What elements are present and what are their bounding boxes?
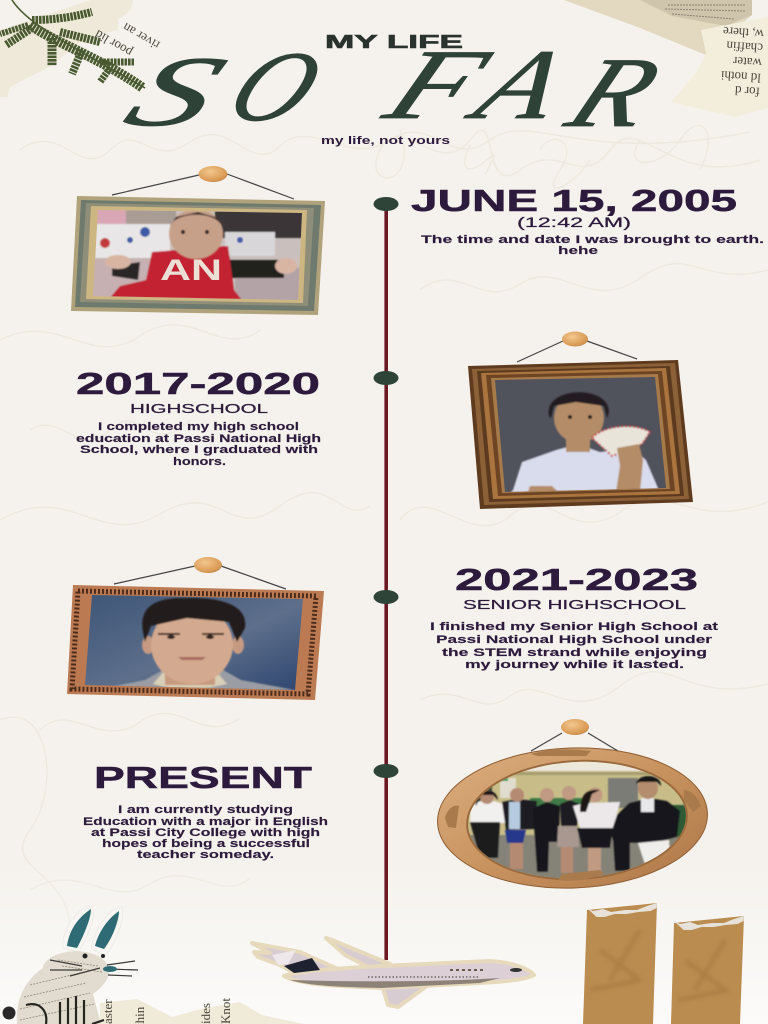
description: School, where I graduated with [80,444,318,456]
paper scrap: top right book [564,0,768,117]
description: my journey while it lasted. [465,659,684,671]
description: the STEM strand while enjoying [442,647,707,659]
period heading: 2017-2020 [76,366,320,401]
timeline dot 4 [374,764,398,778]
paper scrap: top right book: water [732,54,762,71]
description: The time and date I was brought to earth. [421,234,764,246]
text block: 2017-2020 [76,366,321,468]
paper scrap: bottom: ides [198,1003,213,1024]
paper scrap: bottom: aster [100,999,115,1024]
shirt letters: AN [160,254,222,287]
paper scrap: top left: poor lid [92,27,135,60]
paper scrap: top right book: ld nothi [720,68,761,86]
description: Passi National High School under [436,634,713,646]
heading: so far [110,29,677,148]
subheading: HIGHSCHOOL [130,401,268,416]
description: Education with a major in English [83,816,328,828]
description: I finished my Senior High School at [430,621,719,633]
heading: so far: R [551,37,677,148]
person six [611,776,680,871]
fuselage [284,961,534,988]
description [421,234,764,257]
frame: baby photo [71,166,325,315]
paper scrap: bottom: Knot [218,998,233,1024]
heading: my life: MY LIFE [325,32,463,52]
description: teacher someday. [137,849,274,861]
description [83,804,328,861]
person one [470,790,508,858]
time: (12:42 AM) [517,214,631,230]
description: at Passi City College with high [91,827,320,839]
date heading: JUNE 15, 2005 [411,183,737,218]
text block: 2021-2023 [430,562,719,671]
period heading: 2021-2023 [455,562,698,597]
paper scrap: bottom [100,998,304,1024]
paper scrap: top right book: w, there [722,24,764,42]
description [430,621,719,671]
timeline dot 2 [374,371,398,385]
subheading: SENIOR HIGHSCHOOL [463,597,686,612]
heading: so far: O [212,32,339,142]
timeline dot 1 [374,197,398,211]
description: I completed my high school [98,421,299,433]
person two [502,788,537,869]
description: education at Passi National High [76,433,321,445]
description [76,421,321,468]
frame: school portrait [67,557,324,700]
paper scrap: top left: river an [119,20,162,53]
description: hopes of being a successful [102,838,310,850]
tail [252,943,340,976]
icon: rabbit [2,906,138,1024]
tape strip left [583,903,657,1024]
timeline dot 3 [374,590,398,604]
frame: oval group photo [435,719,710,893]
icon: airplane [252,938,534,1007]
text block: june 15 2005 [411,183,764,257]
lower wing [382,983,431,1007]
description: honors. [173,456,226,468]
text block: present [83,760,328,861]
period heading: PRESENT [94,760,312,795]
timeline line [384,204,388,960]
tagline: my life, not yours [321,135,450,147]
upper wing [326,938,390,968]
person three [533,788,560,872]
paper scrap: top left [0,0,162,97]
tape strip right [671,916,744,1024]
heading: so far: S [110,36,241,147]
person five [573,788,620,876]
icon: fern sprig [0,0,145,88]
description: I am currently studying [118,804,293,816]
description: hehe [558,245,598,257]
paper scrap: top right book: chaffin [725,38,763,56]
heading: so far: A [453,29,586,140]
heading: so far: F [369,29,506,140]
title [110,29,677,148]
person four [557,786,580,873]
frame: portrait with cards [468,332,693,509]
paper scrap: top right book: for d [734,83,760,100]
